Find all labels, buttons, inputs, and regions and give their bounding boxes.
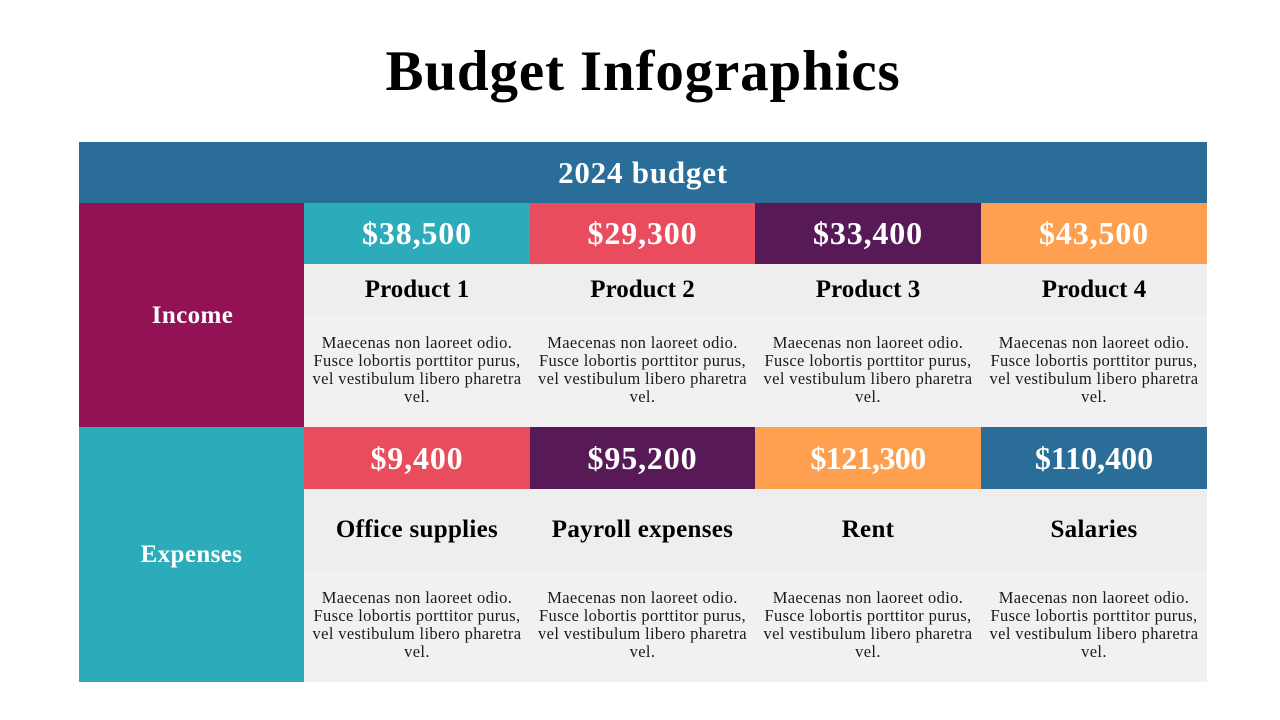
income amount: $33,400 [755,203,981,264]
row label: Income: Income [152,302,233,329]
income amount: $43,500 [981,203,1207,264]
income description 1: Maecenas non laoreet odio. [322,333,512,352]
income description 1 [304,315,530,427]
expense amount: $110,400 [981,427,1207,489]
expense name: Payroll expenses [530,489,755,570]
expense amount: $121,300: $121,300 [810,440,926,476]
title: Budget Infographics [386,40,900,102]
expense name: Office supplies: Office supplies [336,516,498,543]
income amount: $43,500: $43,500 [1039,215,1149,251]
expense description 3: vel vestibulum libero pharetra [764,624,972,643]
expense description 3 [755,570,981,682]
expense description 4: vel. [1081,642,1107,661]
income description 2: vel vestibulum libero pharetra [538,369,747,388]
income product name: Product 3 [755,264,981,315]
expense description 2: Fusce lobortis porttitor purus, [539,606,746,625]
income description 2: vel. [630,387,655,406]
expense description 3: Fusce lobortis porttitor purus, [764,606,972,625]
row label: Income [79,203,304,427]
expense name: Payroll expenses: Payroll expenses [552,516,733,543]
expense amount: $9,400 [304,427,530,489]
expense description 2 [530,570,755,682]
income product name: Product 3: Product 3 [816,276,920,303]
expense amount: $121,300 [755,427,981,489]
expense description 2: vel vestibulum libero pharetra [538,624,747,643]
income product name: Product 2 [530,264,755,315]
table header: 2024 budget [79,142,1207,203]
expense amount: $110,400: $110,400 [1035,440,1153,476]
expense name: Office supplies [304,489,530,570]
income description 4: Fusce lobortis porttitor purus, [990,351,1198,370]
income description 2 [530,315,755,427]
income amount: $33,400: $33,400 [813,215,923,251]
expense description 4 [981,570,1207,682]
income description 4: vel. [1081,387,1107,406]
expense description 3: vel. [855,642,881,661]
income description 1: vel. [404,387,430,406]
expense amount: $95,200: $95,200 [588,440,697,476]
income product name: Product 4 [981,264,1207,315]
income product name: Product 1: Product 1 [365,276,469,303]
expense description 4: vel vestibulum libero pharetra [990,624,1198,643]
income amount: $29,300 [530,203,755,264]
expense description 1: Maecenas non laoreet odio. [322,588,512,607]
expense description 2: vel. [630,642,655,661]
expense description 1: Fusce lobortis porttitor purus, [313,606,520,625]
income description 1: Fusce lobortis porttitor purus, [313,351,520,370]
expense description 4: Fusce lobortis porttitor purus, [990,606,1198,625]
income description 1: vel vestibulum libero pharetra [313,369,521,388]
expense name: Salaries: Salaries [1050,516,1138,543]
expense amount: $95,200 [530,427,755,489]
expense description 1: vel. [404,642,430,661]
income product name: Product 1 [304,264,530,315]
income description 4 [981,315,1207,427]
income amount: $38,500: $38,500 [362,215,472,251]
income description 2: Maecenas non laoreet odio. [547,333,738,352]
income product name: Product 2: Product 2 [590,276,695,303]
income description 3: vel. [855,387,881,406]
row label: Expenses [79,427,304,682]
income description 3: Maecenas non laoreet odio. [773,333,963,352]
expense description 1: vel vestibulum libero pharetra [313,624,521,643]
expense description 2: Maecenas non laoreet odio. [547,588,738,607]
expense description 1 [304,570,530,682]
income description 4: Maecenas non laoreet odio. [999,333,1189,352]
income product name: Product 4: Product 4 [1042,276,1146,303]
expense description 3: Maecenas non laoreet odio. [773,588,963,607]
table header: 2024 budget: 2024 budget [558,154,728,190]
income description 3 [755,315,981,427]
income description 4: vel vestibulum libero pharetra [990,369,1198,388]
expense name: Rent: Rent [842,516,894,543]
budget table [79,142,1207,682]
expense amount: $9,400: $9,400 [370,440,464,476]
income amount: $29,300: $29,300 [588,215,697,251]
income description 3: vel vestibulum libero pharetra [764,369,972,388]
income amount: $38,500 [304,203,530,264]
expense name: Rent [755,489,981,570]
expense description 4: Maecenas non laoreet odio. [999,588,1189,607]
income description 2: Fusce lobortis porttitor purus, [539,351,746,370]
row label: Expenses: Expenses [141,540,242,568]
income description 3: Fusce lobortis porttitor purus, [764,351,972,370]
expense name: Salaries [981,489,1207,570]
